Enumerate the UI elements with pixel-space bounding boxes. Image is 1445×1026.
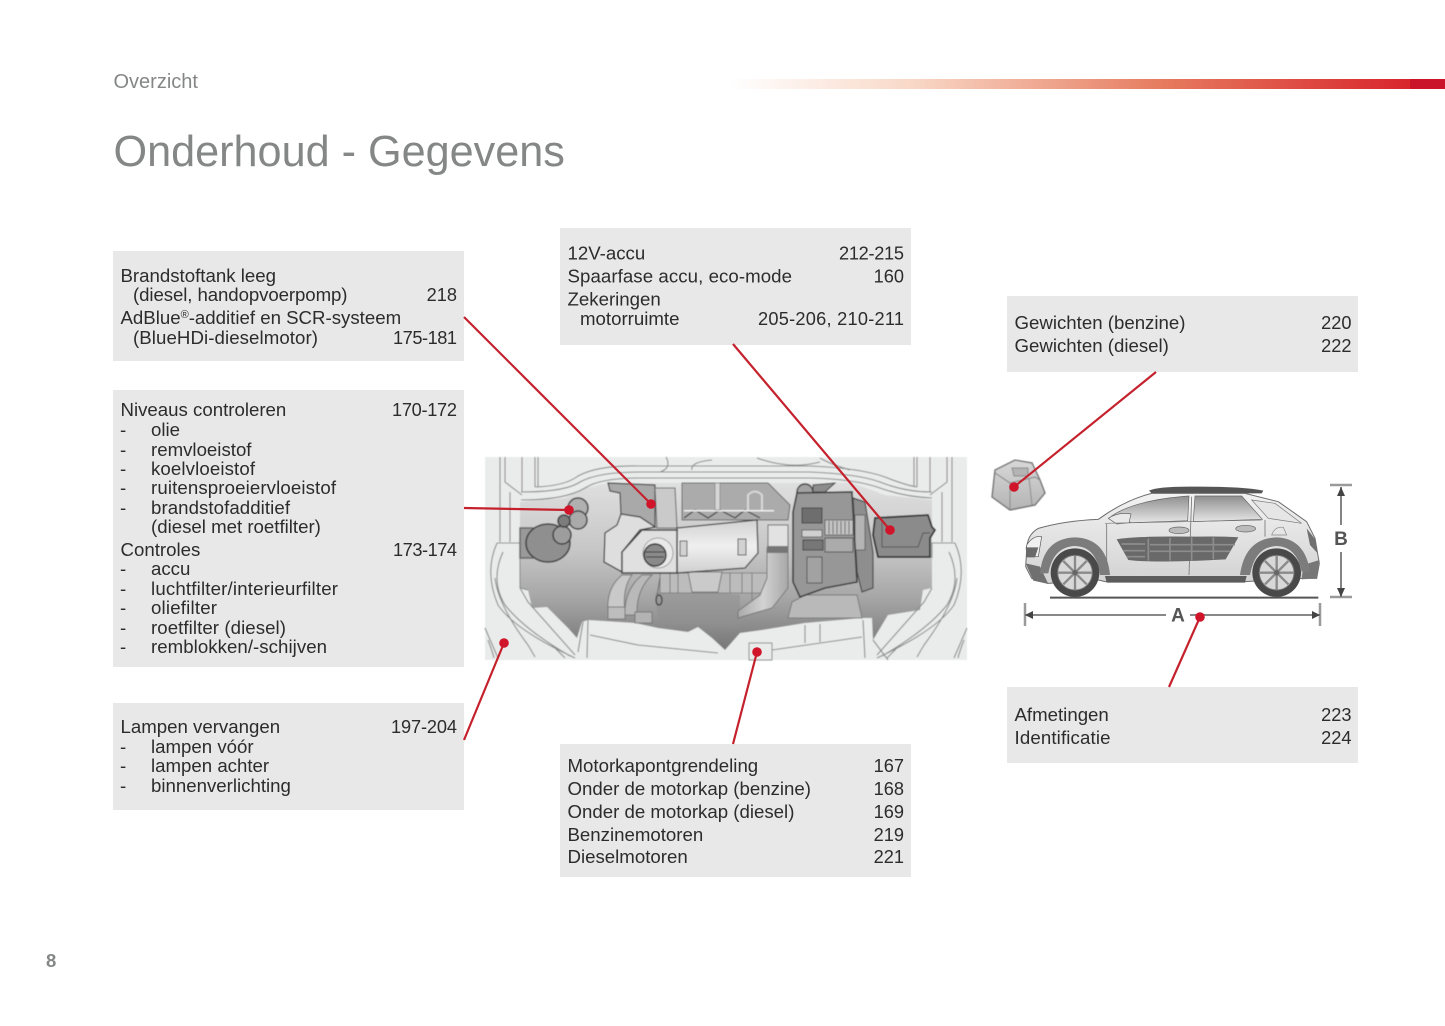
dimension A	[1025, 603, 1320, 626]
panel: fuel and AdBlue	[113, 251, 464, 361]
panel: lamps: lampen achter	[151, 755, 269, 776]
panel: bonnet and engines: Dieselmotoren	[568, 846, 688, 867]
section label: Overzicht: Overzicht	[114, 71, 198, 93]
panel: levels and checks: brandstofadditief	[151, 497, 291, 518]
panel: battery and fuses: Zekeringen	[568, 288, 661, 310]
panel: levels and checks: oliefilter	[151, 597, 217, 618]
panel: levels and checks: -	[120, 578, 126, 599]
wheel nut icon	[992, 460, 1045, 510]
panel: battery and fuses: 205-206, 210-211	[758, 309, 904, 329]
panel: dimensions: 224	[1321, 728, 1352, 748]
sub: dome part	[788, 595, 862, 618]
panel: levels and checks: -	[120, 636, 126, 657]
panel: levels and checks: ruitensproeiervloeistof	[151, 477, 337, 498]
sub: turbo hose	[738, 548, 788, 618]
panel: battery and fuses: 12V-accu	[568, 242, 645, 264]
sub: left engine cover pieces	[608, 483, 655, 527]
sub: roof rail	[1149, 487, 1263, 493]
panel: battery and fuses: 212-215	[839, 244, 904, 264]
panel: levels and checks: Niveaus controleren	[120, 399, 286, 420]
panel: fuel and AdBlue: 175-181	[393, 328, 457, 348]
dimension B: B	[1334, 529, 1348, 550]
panel: dimensions: 223	[1321, 705, 1352, 725]
sub: fuse box	[797, 484, 813, 500]
sub: wheel arch lines right	[877, 543, 967, 658]
panel: levels and checks: -	[120, 458, 126, 479]
sub: long engine cover	[677, 520, 758, 573]
panel: fuel and AdBlue: 218	[427, 285, 457, 305]
panel: lamps: -	[120, 755, 126, 776]
panel: bonnet and engines: Onder de motorkap (diesel)	[568, 801, 794, 822]
sub: rear wheel arch and wheel	[1240, 537, 1310, 575]
panel: weights: Gewichten (benzine)	[1014, 312, 1185, 333]
panel: lamps: Lampen vervangen	[120, 716, 280, 737]
panel: battery and fuses	[560, 228, 911, 345]
sub: bay floor	[520, 483, 932, 650]
panel: levels and checks: -	[120, 477, 126, 498]
panel: levels and checks: -	[120, 558, 126, 579]
panel: levels and checks: 173-174	[393, 540, 457, 560]
panel: fuel and AdBlue: AdBlue	[120, 307, 181, 328]
panel: levels and checks: Controles	[120, 539, 200, 560]
dimension B	[1330, 485, 1352, 597]
dimension A: A	[1171, 606, 1185, 626]
panel: bonnet and engines: 219	[874, 825, 904, 845]
panel: weights: 220	[1321, 313, 1352, 333]
panel: lamps: -	[120, 775, 126, 796]
panel: bonnet and engines: Benzinemotoren	[568, 824, 703, 845]
panel: levels and checks: olie	[151, 419, 180, 440]
sub: windows	[1112, 496, 1189, 523]
panel: levels and checks: -	[120, 497, 126, 518]
sub: ground line	[1050, 595, 1318, 601]
panel: levels and checks: accu	[151, 558, 190, 579]
panel: battery and fuses: Spaarfase accu, eco-mode	[568, 266, 792, 286]
sub: wheel arch lines left	[485, 543, 575, 658]
sub: reservoirs	[520, 498, 588, 562]
panel: levels and checks: luchtfilter/interieurfilter	[151, 578, 338, 599]
panel: bonnet and engines: 169	[874, 802, 904, 822]
header gradient bar	[730, 79, 1445, 89]
sub: front wheel arch and wheel	[1040, 537, 1110, 575]
panel: battery and fuses: 160	[874, 266, 904, 286]
panel: fuel and AdBlue: (diesel, handopvoerpomp)	[133, 284, 348, 305]
car side view	[1026, 487, 1319, 598]
sub: hood latch	[749, 643, 772, 660]
sub: crossmember lines	[578, 620, 888, 660]
sub: door lines and handles	[1107, 497, 1265, 575]
panel: lamps: binnenverlichting	[151, 775, 291, 796]
panel: levels and checks: -	[120, 419, 126, 440]
sub: upper manifold	[682, 483, 790, 520]
page number: 8	[46, 950, 56, 971]
panel: levels and checks: remvloeistof	[151, 439, 252, 460]
panel: fuel and AdBlue: ®	[181, 309, 189, 321]
panel: levels and checks: koelvloeistof	[151, 458, 256, 479]
sub: oil cap block	[622, 530, 677, 573]
sub: battery	[873, 515, 935, 557]
panel: bonnet and engines	[560, 744, 911, 877]
panel: bonnet and engines: 167	[874, 756, 904, 776]
panel: lamps: -	[120, 736, 126, 757]
panel: bonnet and engines: Motorkapontgrendeling	[568, 755, 758, 776]
panel: lamps	[113, 703, 464, 810]
panel: weights: Gewichten (diesel)	[1014, 335, 1169, 356]
panel: dimensions	[1007, 687, 1358, 763]
panel: lamps: 197-204	[391, 717, 457, 737]
sub: sill and lamps	[1105, 576, 1247, 583]
panel: levels and checks: -	[120, 597, 126, 618]
title: Onderhoud - Gegevens	[114, 128, 565, 176]
panel: lamps: lampen vóór	[151, 736, 254, 757]
sub: body	[1026, 493, 1319, 583]
panel: levels and checks: -	[120, 439, 126, 460]
panel: weights	[1007, 296, 1358, 372]
panel: levels and checks: 170-172	[392, 400, 457, 420]
sub: airbump panel	[1117, 536, 1238, 562]
panel: bonnet and engines: 221	[874, 847, 904, 867]
panel: dimensions: Afmetingen	[1014, 704, 1109, 725]
panel: bonnet and engines: Onder de motorkap (benzine)	[568, 778, 811, 799]
panel: bonnet and engines: 168	[874, 779, 904, 799]
red callout leader lines and markers	[464, 317, 1205, 744]
panel: levels and checks	[113, 390, 464, 667]
panel: battery and fuses: motorruimte	[580, 308, 679, 329]
panel: levels and checks: (diesel met roetfilter)	[151, 516, 321, 537]
panel: weights: 222	[1321, 336, 1352, 356]
panel: fuel and AdBlue: Brandstoftank leeg	[120, 265, 276, 286]
panel: levels and checks: roetfilter (diesel)	[151, 617, 286, 638]
sub: lower engine and pipes	[655, 590, 740, 628]
panel: fuel and AdBlue: (BlueHDi-dieselmotor)	[133, 327, 318, 348]
engine bay illustration	[485, 457, 967, 660]
panel: levels and checks: remblokken/-schijven	[151, 636, 327, 657]
panel: fuel and AdBlue: -additief en SCR-systeem	[189, 307, 401, 328]
sub: body structure lines	[497, 457, 538, 590]
panel: dimensions: Identificatie	[1014, 727, 1110, 748]
panel: levels and checks: -	[120, 617, 126, 638]
